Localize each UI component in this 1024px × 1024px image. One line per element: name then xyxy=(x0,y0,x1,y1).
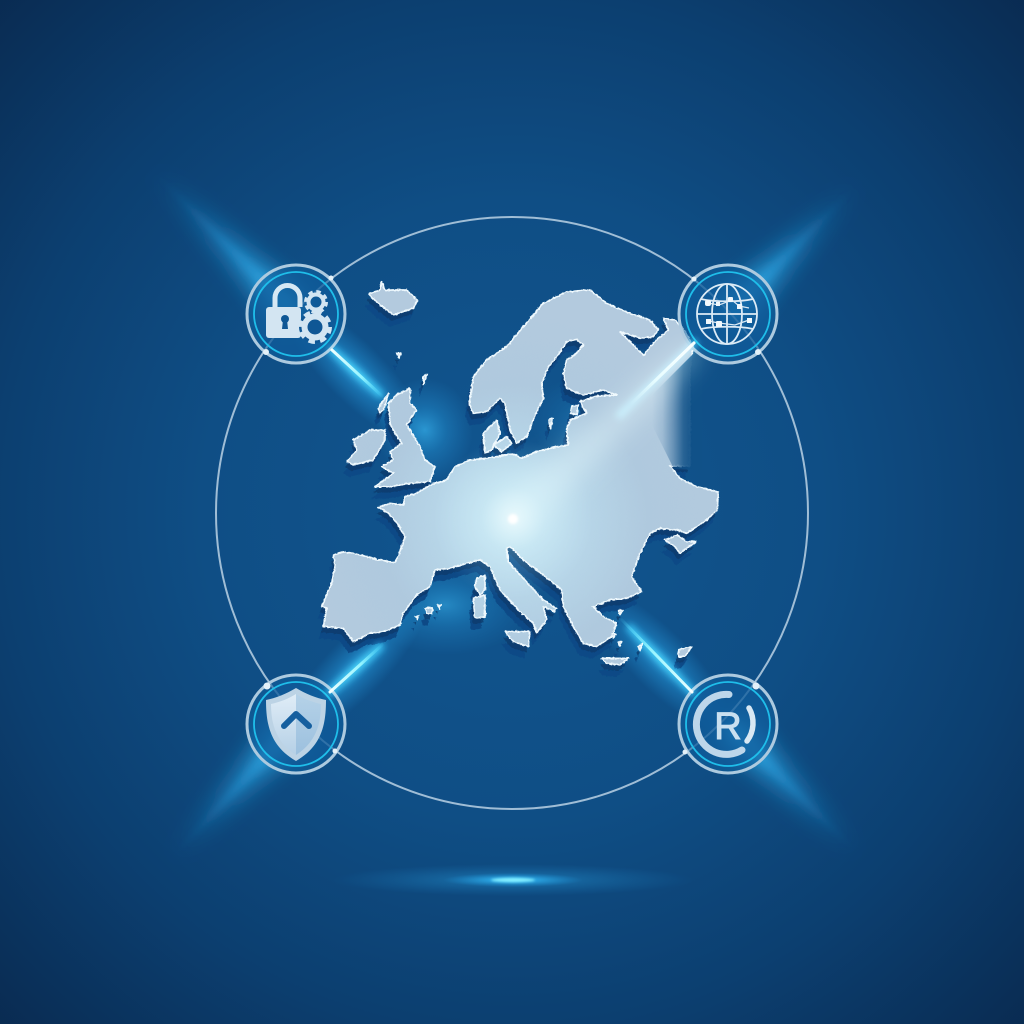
icon: registered mark: R xyxy=(714,706,742,748)
map landmass xyxy=(322,282,718,665)
map of Europe xyxy=(318,282,718,677)
large orbit ring xyxy=(216,217,808,809)
icon: registered mark xyxy=(679,675,777,773)
floor glow xyxy=(333,864,693,896)
icon: network globe xyxy=(679,265,777,363)
central beam and glow xyxy=(433,342,702,599)
map shadow xyxy=(318,294,714,677)
icon: padlock with gears xyxy=(247,265,345,363)
bright beam lines xyxy=(330,343,694,692)
eastern fade of landmass xyxy=(646,345,702,470)
connector dots xyxy=(263,276,761,754)
icon: shield xyxy=(247,675,345,773)
map contact shadow xyxy=(320,288,716,671)
diagonal light rays xyxy=(149,167,861,861)
